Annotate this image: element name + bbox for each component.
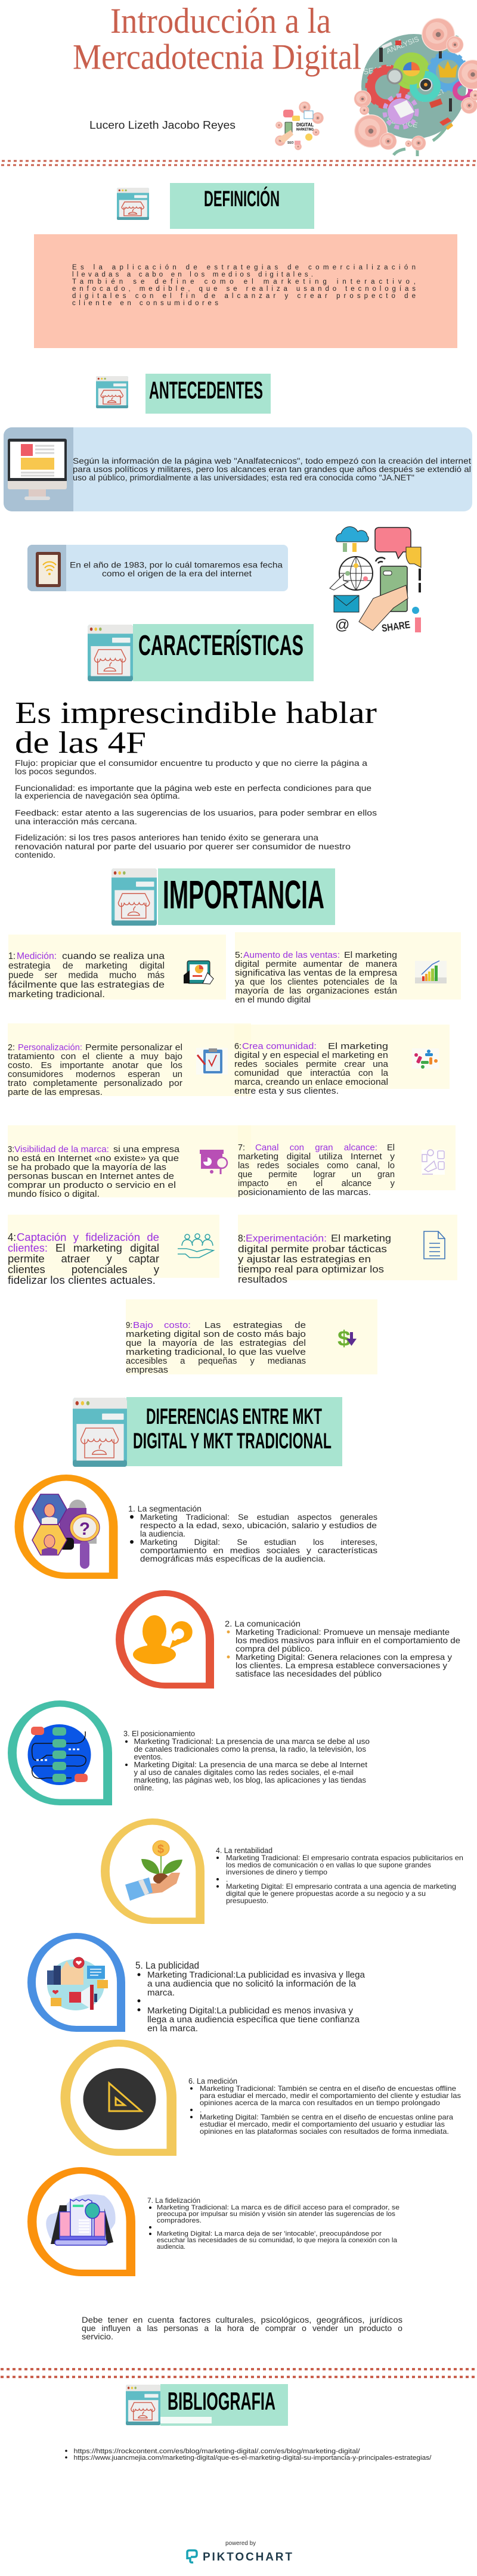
panel: 3 visibilidad de la marca: 3: [8,1144,14,1154]
item 2: la comunicación: los medios masivos para influir en el comportamiento de [236,1635,460,1645]
panel: año 1983: En el año de 1983, por lo cuál tomaremos esa fecha [70,560,283,570]
item 2: la comunicación: 2. La comunicación [225,1619,301,1628]
item 5: la publicidad: a una audiencia que no solicitó la información de la [147,1979,357,1989]
panel: 6 crea comunidad: entre esta y sus clientes. [234,1086,339,1096]
item 3: el posicionamiento: y al uso de canales digitales como las redes sociales, el e-mail [134,1768,354,1777]
illustration: gears on teal circle with flowers [354,18,477,156]
panel: 4 captación y fidelización [8,1215,219,1286]
icon: monitor [8,439,67,500]
panel: 3 visibilidad de la marca: Visibilidad de la marca: [14,1144,109,1154]
references list: https://https://rockcontent.com/es/blog/marketing-digital/.com/es/blog/marketing-digital/ [74,2448,361,2455]
item 4: la rentabilidad: presupuesto. [226,1897,268,1905]
panel: 2 personalización: consumidores modernos esperan un [8,1069,182,1079]
panel: 2 personalización: costo. Es importante anotar que los [8,1060,182,1070]
item 7: la fidelización: Marketing Tradicional: La marca es de difícil acceso para el comprador, se [157,2204,399,2211]
icon: small digital marketing badge: DIGITAL [296,122,314,128]
text block: las 4F: una interacción más cercana. [15,817,137,826]
item 1: la segmentación: comportamiento en medios sociales y características [140,1545,377,1555]
item 7: la fidelización [27,2167,399,2276]
item 4: la rentabilidad: los medios de comunicación o en vallas lo que supone grandes [226,1861,431,1869]
icon: dollar down [337,1326,357,1351]
text block: closing note: Debe tener en cuenta factores culturales, psicológicos, geográficos, jurídicos [82,2315,402,2324]
footer: powered by piktochart: powered by [225,2540,256,2547]
panel: 3 visibilidad de la marca: comprar un producto o servicio en el [8,1180,176,1190]
text block: closing note: que influyen a las personas a la hora de comprar o vender un producto o [82,2323,402,2333]
panel: 4 captación y fidelización: Captación y fidelización de [17,1231,159,1243]
icon: tablet chart [184,961,213,984]
panel: 2 personalización [8,1023,251,1097]
panel: 7 canal con gran alcance: impacto en el alcance y [238,1178,395,1188]
item 2: la comunicación: Marketing Tradicional: Promueve un mensaje mediante [236,1627,450,1637]
panel: 7 canal con gran alcance: El [387,1143,395,1153]
item 3: el posicionamiento [8,1700,370,1805]
panel: historia del internet [4,427,472,511]
item 2: la comunicación: Marketing Digital: Genera relaciones con la empresa y [236,1652,452,1662]
panel: 5 aumento de las ventas [235,932,461,1005]
icon: growth chart [415,961,447,983]
panel: 4 captación y fidelización: permite atraer y captar [8,1253,159,1265]
panel: 3 visibilidad de la marca: personas buscan en Internet antes de [8,1171,174,1181]
panel: 1 medición: estrategia de marketing digital [8,961,165,971]
illustration: gears on teal circle with flowers: TARGET [419,88,446,104]
panel: 3 visibilidad de la marca: no está en Internet «no existe» ya que [8,1153,179,1163]
heading: características [88,624,314,681]
item 4: la rentabilidad: digital que le genere propuestas acorde a su negocio y a su [226,1889,426,1898]
panel: 1 medición: puede ser medida mucho más [8,970,165,980]
panel: historia del internet: Según la información de la página web "Analfatecnicos", todo empezó con la creación del internet [73,456,471,465]
panel: 4 captación y fidelización: clientes: [8,1242,48,1254]
illustration: gears on teal circle with flowers: ANALYSIS [385,35,420,55]
panel: 6 crea comunidad: digital y en especial el marketing en [234,1050,388,1060]
icon: social megaphone [422,1150,445,1175]
item 1: la segmentación: respecto a la edad, sexo, ubicación, salario y estudios de [140,1520,377,1530]
panel: 4 captación y fidelización: 4: [8,1231,16,1243]
heading: importancia [111,868,335,926]
panel: 8 experimentación: 8: [238,1233,246,1244]
panel: 9 bajo costo: que la mayoría de las estrategias del [126,1338,306,1348]
title: Mercadotecnia Digital [73,37,361,76]
item 5: la publicidad: Marketing Digital:La publicidad es menos invasiva y [147,2006,353,2016]
item 4: la rentabilidad [101,1818,463,1924]
panel: 6 crea comunidad [234,1025,450,1096]
panel: 6 crea comunidad: Crea comunidad: [242,1041,317,1051]
item 6: la medición: . [200,2106,202,2114]
icon: community [412,1048,439,1069]
panel: 4 captación y fidelización: El marketing digital [55,1242,159,1254]
panel: definición: También se define como el marketing interactivo, [72,278,416,285]
panel: definición: digitales con el fin de alcanzar y crear prospecto de [72,293,416,300]
text block: las 4F: la experiencia de navegación sea óptima. [15,791,180,800]
text block: las 4F: renovación natural por parte del usuario por querer ser consumidor de nuestro [15,842,351,851]
icon: hexagon audience [32,1494,100,1569]
panel: año 1983: como el origen de la era del internet [102,569,252,578]
icon: tablet wifi [36,552,61,587]
item 5: la publicidad: marca. [147,1988,175,1998]
panel: 5 aumento de las ventas: Aumento de las ventas: [243,950,340,960]
icon: people on hand [178,1234,213,1258]
panel: 1 medición: Medición: [17,951,57,961]
text block: las 4F: Flujo: propiciar que el consumidor encuentre tu producto y que no cierre la página a [15,758,367,768]
heading: diferencias: DIFERENCIAS ENTRE MKT [146,1404,322,1429]
item 1: la segmentación [14,1475,377,1579]
panel: 9 bajo costo: 9: [126,1320,132,1330]
author name: Lucero Lizeth Jacobo Reyes [89,119,236,131]
panel: 3 visibilidad de la marca [8,1125,251,1199]
panel: 7 canal con gran alcance: posicionamiento de las marcas. [238,1187,371,1197]
title [73,1,361,76]
heading: bibliografía [126,2384,288,2426]
panel: 7 canal con gran alcance: que permite lograr un gran [238,1169,395,1180]
panel: historia del internet: uso al público, primordialmente a las universidades; esta red era conocida como "JA.NET" [73,473,414,482]
item 4: la rentabilidad: 4. La rentabilidad [216,1846,272,1855]
panel: definición: Es la aplicación de estrategias de comercialización [72,264,416,271]
item 6: la medición: opiniones en las plataformas sociales con resultados de forma inmediata. [200,2127,449,2136]
panel: 5 aumento de las ventas: digital permite aumentar de manera [235,959,398,969]
item 2: la comunicación: los clientes. La empresa establece conversaciones y [236,1661,447,1670]
panel: 2 personalización: parte de las empresas. [8,1087,103,1097]
item 7: la fidelización: compradores. [157,2217,202,2224]
item 5: la publicidad: en la marca. [147,2023,198,2034]
panel: 2 personalización: Permite personalizar el [85,1042,182,1053]
item 3: el posicionamiento: 3. El posicionamiento [123,1729,195,1738]
panel: 9 bajo costo: Bajo costo: [133,1320,191,1330]
panel: 7 canal con gran alcance: 7: [238,1143,245,1153]
title: Introducción a la [110,1,331,41]
panel: 4 captación y fidelización: clientes potenciales y [8,1264,159,1275]
icon: small digital marketing badge: SEO [287,141,294,145]
item 6: la medición: para estudiar el mercado, medir el comportamiento del cliente y estudiar las [200,2091,461,2100]
panel: 6 crea comunidad: comunidad que interactúa con la [234,1068,389,1078]
icon: presentation [200,1150,227,1174]
panel: 8 experimentación [238,1215,457,1285]
panel: 9 bajo costo: marketing tradicional, lo que las vuelve [126,1347,306,1357]
item 4: la rentabilidad: Marketing Digital: El empresario contrata a una agencia de marketing [226,1882,456,1891]
panel: 5 aumento de las ventas: significativa las ventas de la empresa [235,968,398,978]
item 6: la medición: opiniones acerca de la marca con resultados en un tiempo prolongado [200,2099,440,2107]
icon: set square [83,2068,156,2130]
item 3: el posicionamiento: Marketing Tradicional: La presencia de una marca se debe al uso [134,1737,370,1746]
item 2: la comunicación: compra del público. [236,1644,312,1653]
panel: año 1983 [27,545,288,591]
panel: 8 experimentación: tiempo real para optimizar los [238,1264,384,1275]
icon: clipboard [196,1048,228,1075]
heading: definición: DEFINICIÓN [204,186,280,211]
panel: 2 personalización: Personalización: [18,1042,82,1053]
illustration: social media doodles: SHARE [381,619,411,634]
item 2: la comunicación: satisface las necesidades del público [236,1669,382,1678]
icon: person with speech bubble [133,1615,192,1664]
heading: características: CARACTERÍSTICAS [138,629,303,662]
item 4: la rentabilidad: Marketing Tradicional: El empresario contrata espacios publicitarios en [226,1854,463,1862]
text block: las 4F: los pocos segundos. [15,766,97,776]
icon: small digital marketing badge [275,101,324,150]
panel: 9 bajo costo: marketing digital son de costo más bajo [126,1329,306,1339]
item 3: el posicionamiento: marketing, las páginas web, los blog, las aplicaciones y las tiendas [134,1776,367,1784]
item 7: la fidelización: 7. La fidelización [147,2196,200,2205]
panel: definición: enfocado, medible, que se realiza usando tecnologías [72,285,416,293]
panel: 1 medición: cuando se realiza una [62,951,165,961]
item 3: el posicionamiento: Marketing Digital: La presencia de una marca se debe al Internet [134,1760,367,1769]
heading: diferencias: DIGITAL Y MKT TRADICIONAL [133,1429,332,1453]
text block: las 4F: contenido. [15,850,55,859]
panel: definición: llevadas a cabo en los medios digitales. [72,271,313,278]
icon: advertising [47,1957,108,2010]
icon: money plant in hand [125,1841,182,1901]
panel: 3 visibilidad de la marca: se ha probado que la mayoría de las [8,1162,166,1172]
panel: 2 personalización: 2: [8,1042,15,1053]
references list [65,2448,432,2462]
item 1: la segmentación: Marketing Digital: Se estudian los intereses, [140,1537,377,1547]
panel: 8 experimentación: digital permite probar tácticas [238,1243,387,1255]
item 3: el posicionamiento: de canales tradicionales como la prensa, la radio, la televisión, los [134,1745,367,1753]
illustration: gears on teal circle with flowers: SEARCH [363,63,396,76]
panel: 6 crea comunidad: 6: [234,1041,241,1051]
item 4: la rentabilidad: . [226,1875,228,1883]
panel: 3 visibilidad de la marca: si una empresa [113,1144,180,1154]
panel: 2 personalización: tratamiento con el cliente a muy bajo [8,1051,182,1062]
illustration: gears on teal circle with flowers: CO [447,52,458,60]
panel: 5 aumento de las ventas: El marketing [344,950,397,960]
text block: las 4F: Feedback: estar atento a las sugerencias de los usuarios, para poder sembrar en ellos [15,808,377,818]
item 3: el posicionamiento: eventos. [134,1752,163,1761]
item 5: la publicidad: llega a una audiencia específica que tiene confianza [147,2015,360,2025]
heading: antecedentes: ANTECEDENTES [149,377,263,404]
panel: 7 canal con gran alcance [238,1125,456,1197]
footer: powered by piktochart: PIKTOCHART [203,2551,292,2563]
panel: 1 medición [8,935,226,1000]
icon: money plant in hand: $ [157,1843,164,1856]
item 3: el posicionamiento: online. [134,1783,154,1792]
item 5: la publicidad: Marketing Tradicional:La publicidad es invasiva y llega [147,1970,366,1980]
item 1: la segmentación: la audiencia. [140,1529,185,1538]
item 6: la medición: estudiar el mercado, medir el comportamiento del usuario y estudiar las [200,2120,445,2128]
item 2: la comunicación [116,1590,460,1689]
text block: closing note: servicio. [82,2332,113,2341]
panel: 9 bajo costo [126,1299,377,1375]
item 7: la fidelización: Marketing Digital: La marca deja de ser 'intocable', preocupándose por [157,2230,382,2237]
item 1: la segmentación: Marketing Tradicional: Se estudian aspectos generales [140,1512,377,1522]
panel: 6 crea comunidad: El marketing [328,1041,388,1051]
illustration: gears on teal circle with flowers: SERVICE [386,116,419,129]
heading: las 4F: Es imprescindible hablar [15,696,377,730]
icon: document [424,1231,445,1259]
panel: 8 experimentación: Experimentación: [246,1233,327,1244]
illustration: social media doodles: @ [335,617,349,633]
icon: hexagon audience: ? [79,1519,90,1539]
panel: 9 bajo costo: Las estrategias de [205,1320,306,1330]
item 6: la medición: 6. La medición [188,2077,237,2085]
text block: las 4F: Funcionalidad: es importante que la página web este en perfecta condiciones para que [15,783,371,793]
heading: antecedentes [96,374,271,414]
icon: dollar down: $ [337,1326,351,1351]
panel: 1 medición: marketing tradicional. [8,989,105,1000]
item 1: la segmentación: demográficas más específicas de la audiencia. [140,1554,326,1563]
panel: 6 crea comunidad: marca, creando un enlace emocional [234,1077,388,1087]
panel: 7 canal con gran alcance: marketing digital utiliza Internet y [238,1152,395,1162]
text block: las 4F: Fidelización: si los tres pasos anteriores han tenido éxito se generara una [15,833,318,842]
panel: 5 aumento de las ventas: ya que los clientes potenciales de la [235,977,398,987]
panel: 8 experimentación: y ajustar las estrategias en [238,1253,371,1265]
item 6: la medición: Marketing Tradicional: También se centra en el diseño de encuestas offline [200,2084,456,2093]
item 1: la segmentación: 1. La segmentación [128,1504,202,1513]
panel: 5 aumento de las ventas: en el mundo digital [235,995,311,1005]
panel: 5 aumento de las ventas: 5: [235,950,243,960]
item 7: la fidelización: audiencia. [157,2243,185,2251]
item 5: la publicidad [27,1933,366,2034]
item 4: la rentabilidad: inversiones de dinero y tiempo [226,1868,327,1876]
panel: 1 medición: 1: [8,951,16,961]
item 6: la medición [61,2040,461,2156]
panel: definición [34,234,457,348]
heading: las 4F: de las 4F [15,726,146,760]
heading: bibliografía: BIBLIOGRAFIA [168,2387,275,2415]
references list: https://www.juancmejia.com/marketing-digital/que-es-el-marketing-digital-su-importancia-y-principales-estrategias/ [74,2454,432,2462]
heading: diferencias [73,1397,342,1467]
panel: definición: cliente en consumidores [72,300,218,307]
heading: las 4F [15,696,377,760]
item 7: la fidelización: escuchar las necesidades de su comunidad, lo que mejora la conexión con la [157,2237,398,2244]
text block: closing note [82,2315,402,2341]
icon: small digital marketing badge: MARKETING [296,128,314,132]
heading: definición [117,183,314,229]
item 7: la fidelización: preocupa por impulsar su misión y visión sin atender las sugerencias de los [157,2211,396,2218]
panel: 8 experimentación: El marketing [331,1233,391,1244]
footer: powered by piktochart [187,2540,292,2563]
panel: 9 bajo costo: empresas [126,1365,168,1375]
panel: 5 aumento de las ventas: mayoría de las organizaciones están [235,986,397,996]
panel: 4 captación y fidelización: fidelizar los clientes actuales. [8,1274,156,1286]
panel: historia del internet: para usos políticos y militares, pero los alcances eran tan grandes que años después se extendió al [73,464,471,474]
icon: laptop receipt [46,2195,116,2245]
heading: importancia: IMPORTANCIA [163,873,324,917]
icon: blue flow diagram [27,1724,91,1785]
panel: 7 canal con gran alcance: las redes sociales como canal, lo [238,1160,395,1171]
illustration: social media doodles [330,527,421,634]
panel: 6 crea comunidad: redes sociales permite crear una [234,1059,389,1069]
text block: las 4F [15,758,377,859]
item 6: la medición: Marketing Digital: También se centra en el diseño de encuestas online para [200,2113,453,2121]
panel: 9 bajo costo: accesibles a pequeñas y medianas [126,1356,306,1366]
panel: 7 canal con gran alcance: Canal con gran alcance: [255,1143,377,1153]
panel: 8 experimentación: resultados [238,1274,287,1285]
panel: 2 personalización: trato completamente personalizado por [8,1078,182,1088]
item 5: la publicidad: 5. La publicidad [135,1960,199,1971]
panel: 3 visibilidad de la marca: mundo físico o digital. [8,1189,100,1199]
panel: 1 medición: fácilmente que las estrategias de [8,980,165,990]
